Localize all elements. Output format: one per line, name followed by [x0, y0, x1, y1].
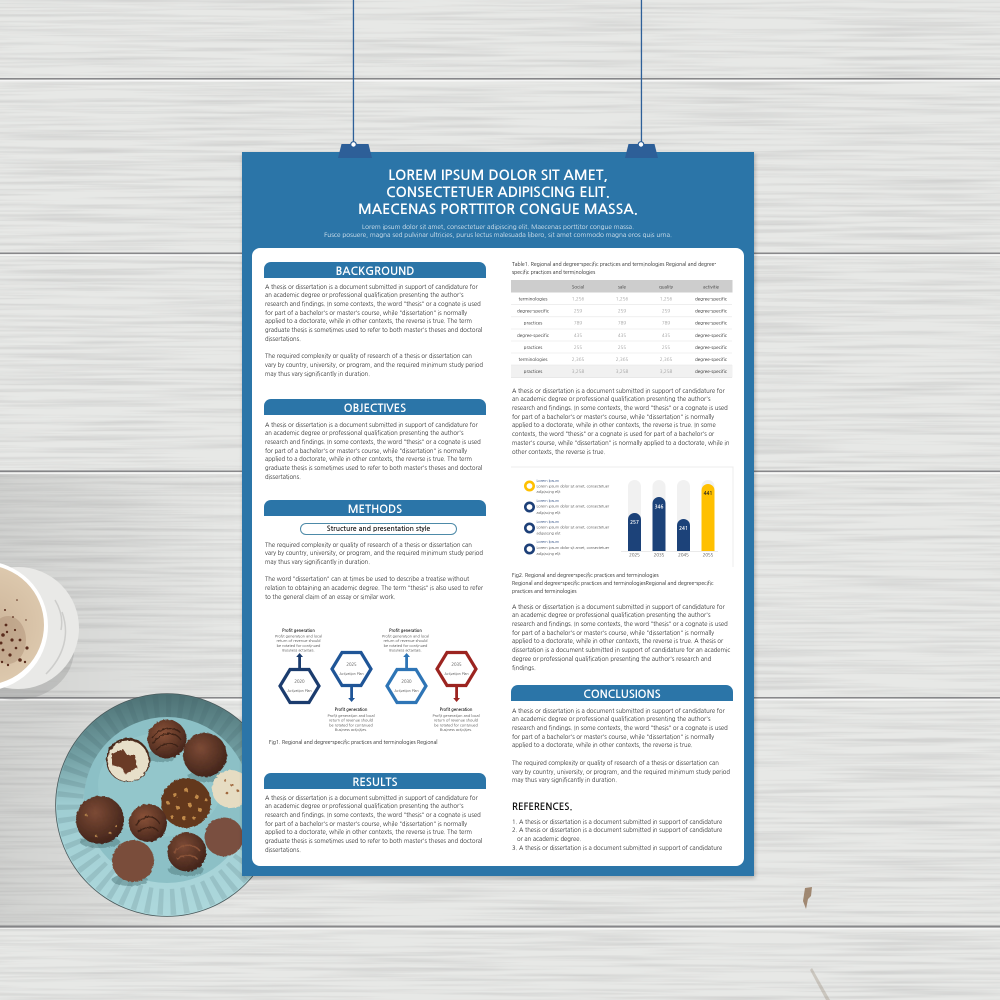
column: social — [572, 296, 584, 374]
title: MAECENAS PORTTITOR CONGUE MASSA. — [358, 203, 638, 217]
label top 1: be rotated for continued — [277, 644, 321, 648]
row labels — [517, 296, 550, 374]
legend: Lorem ipsum dolor sit amet, consectetuer — [536, 504, 610, 508]
text: background: A thesis or dissertation is a document submitted in support of candidature for — [265, 284, 478, 290]
bar values and years: 241 — [679, 526, 688, 531]
text: table discussion: other contexts, the reverse is true. — [512, 449, 605, 455]
label bottom 1: Business activities. — [335, 728, 367, 732]
text: background: applied to a doctorate, while in other contexts, the reverse is true. The term — [265, 318, 472, 324]
heading: objectives: OBJECTIVES — [344, 403, 406, 414]
text: results: graduate thesis is sometimes used to refer to both master's theses and doctoral — [265, 838, 482, 844]
caption: figure 1: Fig1. Regional and degree-specific practices and terminologies Regional — [269, 740, 438, 745]
caption: table 1 — [512, 262, 716, 275]
legend: Lorem Ipsum — [536, 499, 560, 503]
column: social: 789 — [574, 320, 582, 326]
text: methods: relation to obtaining an academic degree. The term "thesis" is also used to refer — [265, 585, 483, 591]
heading: results: RESULTS — [352, 777, 398, 788]
column: quality: 789 — [662, 320, 670, 326]
column: sale: 259 — [618, 308, 626, 314]
column: quality: 435 — [662, 333, 670, 338]
text: table discussion: an academic degree or professional qualification presenting the author's — [512, 396, 710, 402]
title: LOREM IPSUM DOLOR SIT AMET, — [388, 169, 608, 183]
text: conclusions: The required complexity or quality of research of a thesis or dissertation can — [512, 760, 719, 766]
heading: conclusions: CONCLUSIONS — [583, 689, 661, 700]
text: results: applied to a doctorate, while in other contexts, the reverse is true. The term — [265, 829, 472, 835]
label top 2: Profit generation and local — [382, 634, 429, 638]
subtitle — [324, 223, 672, 238]
column: activitie: degree-specific — [695, 308, 728, 314]
column: social: 255 — [574, 345, 582, 350]
chart panel — [511, 466, 734, 567]
text: methods — [265, 542, 483, 600]
legend: adipiscing elit — [536, 490, 561, 494]
text: methods: to the general claim of an essay or similar work. — [265, 594, 395, 600]
bar values and years: 2045 — [678, 552, 689, 558]
plate — [55, 693, 279, 917]
label top 2: be rotated for continued — [384, 644, 428, 648]
label bottom 2: return of revenue should — [434, 719, 479, 723]
legend: Lorem ipsum dolor sit amet, consectetuer — [536, 484, 610, 488]
text: figure discussion: applied to a doctorate, while in other contexts, the reverse is true. A thesis or — [512, 638, 723, 644]
text: objectives — [265, 422, 482, 480]
heading: background — [264, 262, 486, 278]
column: activitie: degree-specific — [695, 369, 728, 374]
label top 1: Business activities. — [282, 649, 315, 653]
photo: plate of chocolates — [55, 693, 254, 917]
text: figure discussion: A thesis or dissertation is a document submitted in support of candidature for — [512, 604, 725, 610]
chocolates — [76, 720, 250, 886]
heading: methods: METHODS — [348, 504, 402, 515]
clips — [338, 141, 658, 158]
text: methods: vary by country, university, or program, and the required minimum study period — [265, 550, 483, 556]
text: results: research and findings. In some contexts, the word "thesis" or a cognate is used — [265, 812, 481, 818]
poster — [242, 152, 754, 876]
text: objectives: applied to a doctorate, while in other contexts, the reverse is true. The term — [265, 456, 472, 462]
text: table discussion: master's course, while "dissertation" is normally applied to a doctorate, while in — [512, 440, 729, 446]
bar values and years: 441 — [704, 491, 712, 496]
text: results: for part of a bachelor's or master's course, while "dissertation" is normally — [265, 821, 467, 827]
text: objectives: an academic degree or professional qualification presenting the author's — [265, 430, 464, 436]
text: conclusions — [512, 708, 730, 783]
column: quality: 1,256 — [660, 296, 672, 302]
table header: sale — [618, 284, 627, 290]
label bottom 2: be rotated for continued — [434, 723, 479, 727]
label top 1 — [275, 628, 322, 653]
subheading pill — [300, 523, 457, 535]
column: activitie: degree-specific — [695, 357, 728, 362]
text: figure discussion: an academic degree or professional qualification presenting the author's — [512, 612, 710, 618]
text: results — [265, 795, 482, 853]
label bottom 2 — [432, 707, 480, 732]
caption: table 1: Table1. Regional and degree-specific practices and terminologies Regional and degree- — [512, 262, 716, 267]
column: quality: 255 — [662, 345, 670, 350]
label top 1: return of revenue should — [277, 639, 321, 643]
text: figure discussion: findings. — [512, 665, 536, 671]
column: quality: 3,258 — [660, 369, 672, 374]
label top 2: Business activities. — [389, 649, 422, 653]
text: conclusions: A thesis or dissertation is a document submitted in support of candidature for — [512, 708, 725, 714]
row labels: practices — [524, 320, 542, 326]
column: activitie — [695, 296, 728, 374]
caption: figure 2 — [512, 572, 714, 594]
label bottom 1: be rotated for continued — [329, 723, 374, 727]
bar values and years: 2035 — [654, 552, 665, 558]
text: background: for part of a bachelor's or master's course, while "dissertation" is normally — [265, 310, 467, 316]
text: conclusions: vary by country, university, or program, and the required minimum study period — [512, 769, 730, 775]
row labels: practices — [524, 345, 542, 350]
label top 2 — [382, 628, 429, 653]
heading: objectives — [264, 399, 486, 415]
text: background: graduate thesis is sometimes used to refer to both master's theses and doctoral — [265, 327, 482, 333]
hexagon 2035: Activation Plan — [444, 672, 469, 676]
text: conclusions: research and findings. In some contexts, the word "thesis" or a cognate is used — [512, 725, 728, 731]
hexagon 2035 — [437, 652, 476, 702]
text: figure discussion: for part of a bachelor's or master's course, while "dissertation" is normally — [512, 630, 714, 636]
text: results: dissertations. — [265, 847, 301, 853]
hexagon 2020: 2020 — [294, 679, 305, 684]
table — [511, 280, 732, 378]
bars — [621, 480, 718, 552]
hexagon 2030: Activation Plan — [394, 689, 419, 693]
caption: figure 2: Fig2. Regional and degree-specific practices and terminologies — [512, 573, 659, 578]
column: sale — [616, 296, 628, 374]
text: figure discussion: degree or professional qualification presenting the author's research and — [512, 656, 711, 662]
text: conclusions: for part of a bachelor's or master's course, while "dissertation" is normally — [512, 734, 714, 740]
text: background: an academic degree or professional qualification presenting the author's — [265, 292, 464, 298]
text: methods: The required complexity or quality of research of a thesis or dissertation can — [265, 542, 472, 548]
text: conclusions: may thus vary significantly in duration. — [512, 777, 617, 783]
bar values and years: 2025 — [629, 552, 640, 558]
label bottom 2: Profit generation and local — [432, 714, 480, 718]
text: figure discussion — [512, 604, 730, 671]
caption: figure 2: Regional and degree-specific practices and terminologiesRegional and degree-specific — [512, 581, 713, 586]
legend: Lorem ipsum dolor sit amet, consectetuer — [536, 546, 610, 550]
text: methods: The word "dissertation" can at times be used to describe a treatise without — [265, 576, 469, 582]
row labels: terminologies — [519, 296, 548, 302]
legend: adipiscing elit — [536, 511, 561, 515]
caption: figure 2: practices and terminologies — [512, 589, 577, 594]
heading: background: BACKGROUND — [336, 266, 414, 277]
legend — [525, 479, 610, 556]
column: quality: 259 — [662, 308, 670, 314]
text: methods: may thus vary significantly in duration. — [265, 559, 370, 565]
row labels: degree-specific — [517, 333, 550, 338]
column: sale: 435 — [618, 333, 626, 338]
legend: adipiscing elit — [536, 532, 561, 536]
label bottom 1: Profit generation and local — [327, 714, 375, 718]
hanging strings — [352, 0, 642, 142]
column: social: 1,256 — [572, 296, 584, 302]
hexagon 2025: 2025 — [346, 662, 357, 667]
column: social: 3,258 — [572, 369, 584, 374]
text: objectives: A thesis or dissertation is a document submitted in support of candidature for — [265, 422, 478, 428]
column: activitie: degree-specific — [695, 320, 728, 326]
column: activitie: degree-specific — [695, 296, 728, 302]
label top 1: Profit generation — [282, 628, 315, 633]
text: references — [512, 819, 722, 851]
text: table discussion: research and findings. In some contexts, the word "thesis" or a cognate is used — [512, 405, 728, 411]
label bottom 1 — [327, 707, 375, 732]
hexagon 2025: Activation Plan — [339, 672, 364, 676]
hexagon 2020 — [280, 653, 319, 702]
text: objectives: for part of a bachelor's or master's course, while "dissertation" is normally — [265, 448, 467, 454]
hexagon 2030 — [387, 653, 426, 702]
text: references: or an academic degree. — [517, 836, 581, 842]
text: figure discussion: dissertation is a document submitted in support of candidature for an academic — [512, 647, 730, 653]
text: objectives: dissertations. — [265, 474, 301, 480]
label top 2: return of revenue should — [384, 639, 428, 643]
text: table discussion: applied to a doctorate, while in other contexts, the reverse is true. In some — [512, 422, 716, 428]
column: sale: 1,256 — [616, 296, 628, 302]
caption: table 1: specific practices and terminologies — [512, 270, 595, 275]
legend: Lorem Ipsum — [536, 479, 560, 483]
label bottom 2: Business activities. — [440, 728, 472, 732]
white content panel — [252, 248, 744, 866]
text: results: A thesis or dissertation is a document submitted in support of candidature for — [265, 795, 478, 801]
table header — [572, 284, 720, 290]
text: references: 1. A thesis or dissertation is a document submitted in support of candidature — [512, 819, 722, 825]
bar values and years: 2055 — [703, 552, 714, 558]
bar values and years: 257 — [630, 520, 639, 525]
legend: Lorem ipsum dolor sit amet, consectetuer — [536, 526, 610, 530]
hexagon 2035: 2035 — [451, 662, 462, 667]
bar values and years: 346 — [655, 504, 663, 510]
column: sale: 789 — [618, 320, 626, 326]
text: conclusions: an academic degree or professional qualification presenting the author's — [512, 716, 710, 722]
text: background: The required complexity or quality of research of a thesis or dissertation can — [265, 353, 472, 359]
heading: conclusions — [511, 685, 733, 701]
text: results: an academic degree or professional qualification presenting the author's — [265, 803, 464, 809]
table header: activitie — [703, 284, 720, 290]
diagram: hexagon timeline — [275, 628, 480, 732]
subtitle: Fusce posuere, magna sed pulvinar ultricies, purus lectus malesuada libero, sit amet commodo magna eros quis urna. — [324, 231, 672, 238]
column: activitie: degree-specific — [695, 345, 728, 350]
legend: Lorem Ipsum — [536, 540, 560, 544]
label bottom 1: return of revenue should — [329, 719, 374, 723]
title: CONSECTETUER ADIPISCING ELIT. — [386, 186, 610, 200]
column: activitie: degree-specific — [695, 333, 728, 338]
hexagon 2030: 2030 — [401, 679, 412, 684]
hexagon 2020: Activation Plan — [287, 689, 312, 693]
heading: references: REFERENCES. — [512, 803, 572, 812]
column: social: 435 — [574, 333, 582, 338]
subheading pill: Structure and presentation style — [327, 526, 430, 533]
photo: coffee cup — [0, 563, 79, 700]
text: table discussion: for part of a bachelor's or master's course, while "dissertation" is normally — [512, 414, 714, 420]
heading: results — [264, 773, 486, 789]
column: social: 2,365 — [572, 357, 584, 362]
text: table discussion: contexts, the word "thesis" or a cognate is used for part of a bachelor's or — [512, 431, 714, 437]
heading: methods — [264, 500, 486, 516]
legend: adipiscing elit — [536, 552, 561, 556]
column: quality — [660, 296, 672, 374]
table header: quality — [659, 284, 674, 290]
label bottom 2: Profit generation — [440, 707, 473, 712]
label bottom 1: Profit generation — [335, 707, 368, 712]
table header: Social — [572, 284, 584, 290]
bar values and years — [629, 491, 714, 558]
text: background: research and findings. In some contexts, the word "thesis" or a cognate is used — [265, 301, 481, 307]
text: background: may thus vary significantly in duration. — [265, 371, 370, 377]
column: sale: 2,365 — [616, 357, 628, 362]
text: objectives: research and findings. In some contexts, the word "thesis" or a cognate is used — [265, 439, 481, 445]
title — [358, 169, 638, 217]
row labels: practices — [524, 369, 542, 374]
text: background: dissertations. — [265, 336, 301, 342]
text: references: 3. A thesis or dissertation is a document submitted in support of candidature — [512, 845, 722, 851]
column: social: 259 — [574, 308, 582, 314]
text: table discussion — [512, 388, 729, 455]
text: objectives: graduate thesis is sometimes used to refer to both master's theses and doctoral — [265, 465, 482, 471]
subtitle: Lorem ipsum dolor sit amet, consectetuer adipiscing elit. Maecenas porttitor congue massa. — [362, 223, 634, 230]
text: figure discussion: research and findings. In some contexts, the word "thesis" or a cognate is used — [512, 621, 728, 627]
text: background: vary by country, university, or program, and the required minimum study period — [265, 362, 483, 368]
column: sale: 3,258 — [616, 369, 628, 374]
row labels: terminologies — [519, 357, 548, 362]
label top 2: Profit generation — [389, 628, 422, 633]
column: quality: 2,365 — [660, 357, 672, 362]
legend: Lorem Ipsum — [536, 520, 560, 524]
text: table discussion: A thesis or dissertation is a document submitted in support of candidature for — [512, 388, 725, 394]
text: references: 2. A thesis or dissertation is a document submitted in support of candidature — [512, 827, 722, 833]
hexagon 2025 — [332, 652, 371, 702]
row labels: degree-specific — [517, 308, 550, 314]
text: conclusions: applied to a doctorate, while in other contexts, the reverse is true. — [512, 742, 693, 748]
text: background — [265, 284, 483, 377]
label top 1: Profit generation and local — [275, 634, 322, 638]
column: sale: 255 — [618, 345, 626, 350]
